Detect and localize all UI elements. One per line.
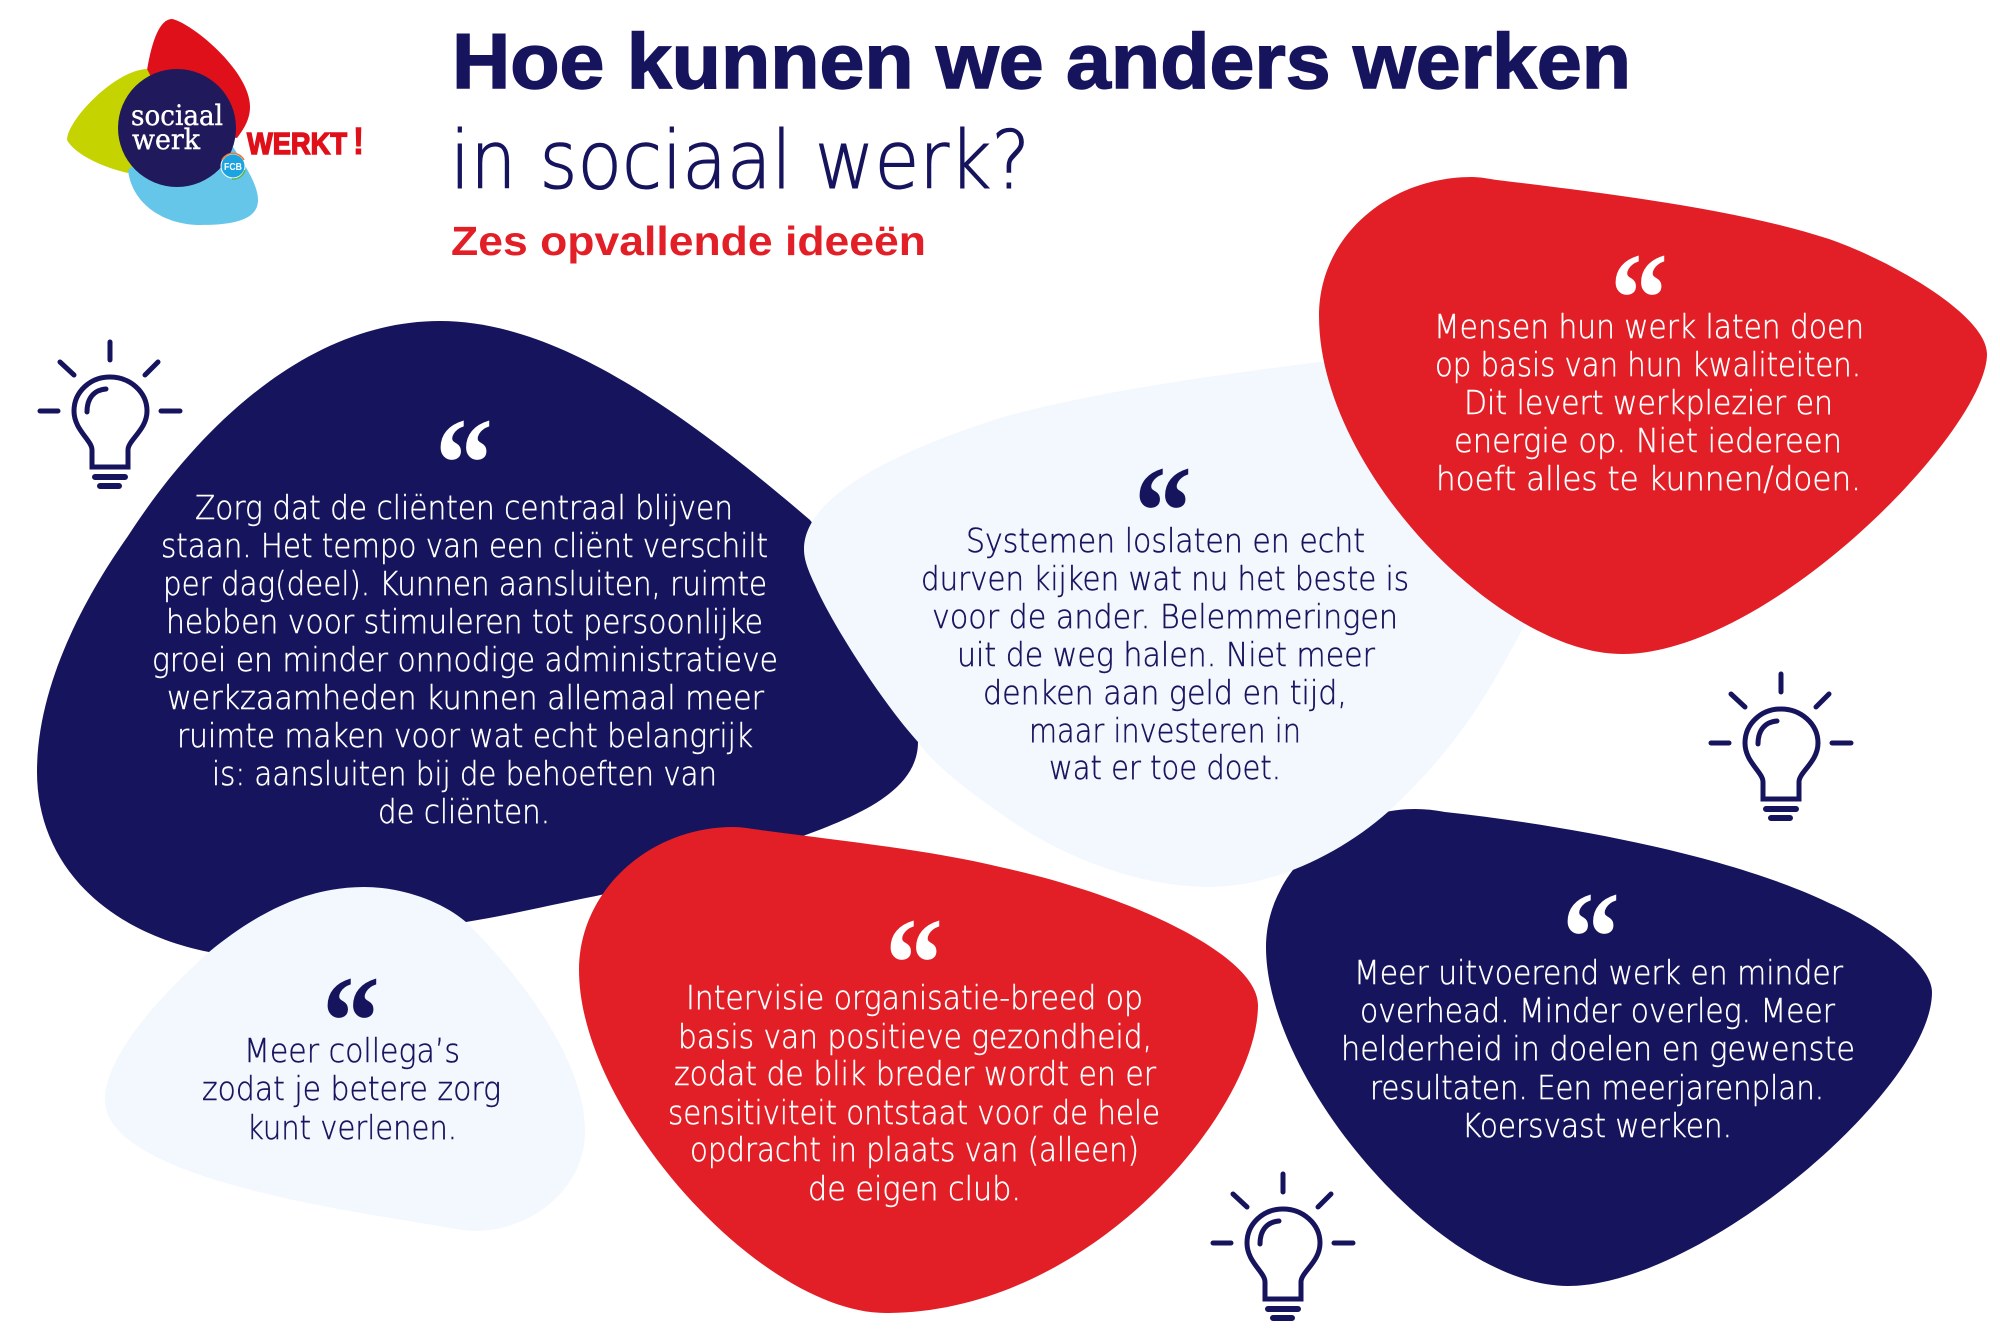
title: Hoe kunnen we anders werken (452, 17, 1631, 105)
text block: systems: wat er toe doet. (1049, 748, 1281, 787)
panel: light blob systems (804, 361, 1540, 887)
text block: intervision: Intervisie organisatie-breed op (686, 978, 1143, 1017)
text block: clients: ruimte maken voor wat echt belangrijk (177, 716, 753, 755)
text block: intervision: basis van positieve gezondheid, (678, 1017, 1152, 1056)
logo: sociaal werk werkt: ! (353, 121, 364, 163)
text block: systems: maar investeren in (1029, 711, 1301, 750)
text block: intervision: sensitiviteit ontstaat voor de hele (668, 1093, 1160, 1132)
text block: overhead: resultaten. Een meerjarenplan. (1370, 1068, 1824, 1107)
text block: overhead: overhead. Minder overleg. Meer (1360, 991, 1835, 1030)
logo: sociaal werk werkt (67, 19, 364, 225)
text block: qualities: “ (1610, 227, 1668, 371)
text block: overhead: “ (1562, 866, 1620, 1010)
text block: systems: Systemen loslaten en echt (966, 521, 1365, 560)
text block: overhead (1341, 866, 1855, 1145)
panel: navy blob overhead (1266, 809, 1932, 1286)
text block: intervision: zodat de blik breder wordt en er (674, 1054, 1156, 1093)
text block: clients: is: aansluiten bij de behoeften van (212, 754, 717, 793)
text block: intervision: de eigen club. (808, 1169, 1021, 1208)
text block: qualities: Mensen hun werk laten doen (1434, 307, 1864, 346)
text block: overhead: helderheid in doelen en gewenste (1341, 1029, 1855, 1068)
title: in sociaal werk? (450, 114, 1030, 207)
logo: sociaal werk werkt: WERKT (247, 126, 347, 161)
text block: intervision (668, 892, 1160, 1208)
text block: clients: per dag(deel). Kunnen aansluiten, ruimte (163, 564, 767, 603)
icon: light bulb right (1711, 674, 1851, 818)
text block: clients: werkzaamheden kunnen allemaal meer (167, 678, 764, 717)
text block: colleagues: zodat je betere zorg (202, 1069, 501, 1108)
text block: qualities: energie op. Niet iedereen (1454, 421, 1842, 460)
text block: overhead: Koersvast werken. (1462, 1106, 1732, 1145)
text block: clients: de cliënten. (378, 792, 550, 831)
text block: systems: durven kijken wat nu het beste is (921, 559, 1409, 598)
text block: qualities: Dit levert werkplezier en (1464, 383, 1833, 422)
text block: clients: staan. Het tempo van een cliënt verschilt (161, 526, 768, 565)
text block: systems: denken aan geld en tijd, (983, 673, 1347, 712)
text block: systems (921, 440, 1409, 787)
text block: colleagues: kunt verlenen. (247, 1108, 457, 1147)
logo: sociaal werk werkt: werk (132, 123, 201, 156)
icon: light bulb top left (40, 342, 180, 486)
panel: light blob colleagues (105, 887, 585, 1231)
text block: systems: uit de weg halen. Niet meer (957, 635, 1375, 674)
panel: red blob intervision (579, 827, 1258, 1313)
text block: overhead: Meer uitvoerend werk en minder (1354, 953, 1843, 992)
text block: clients: Zorg dat de cliënten centraal blijven (195, 488, 733, 527)
text block: clients: groei en minder onnodige administratieve (152, 640, 778, 679)
text block: systems: “ (1134, 440, 1192, 584)
text block: qualities (1434, 227, 1864, 498)
subtitle: Zes opvallende ideeën (451, 218, 926, 264)
panel: navy blob clients (37, 321, 918, 956)
text block: colleagues: “ (322, 950, 380, 1094)
panel: red blob qualities (1319, 177, 1987, 654)
text block: qualities: hoeft alles te kunnen/doen. (1436, 459, 1861, 498)
text block: intervision: “ (885, 892, 943, 1036)
text block: clients (152, 392, 778, 831)
icon: light bulb bottom (1213, 1174, 1353, 1318)
text block: systems: voor de ander. Belemmeringen (932, 597, 1398, 636)
text block: clients: hebben voor stimuleren tot persoonlijke (166, 602, 763, 641)
text block: clients: “ (435, 392, 493, 536)
text block: colleagues (202, 950, 501, 1147)
text block: intervision: opdracht in plaats van (alleen) (690, 1130, 1139, 1169)
text block: colleagues: Meer collega’s (244, 1031, 460, 1070)
title (450, 17, 1631, 207)
text block: qualities: op basis van hun kwaliteiten. (1435, 345, 1861, 384)
logo: sociaal werk werkt: sociaal (131, 99, 223, 132)
logo: sociaal werk werkt: FCB (224, 162, 242, 173)
